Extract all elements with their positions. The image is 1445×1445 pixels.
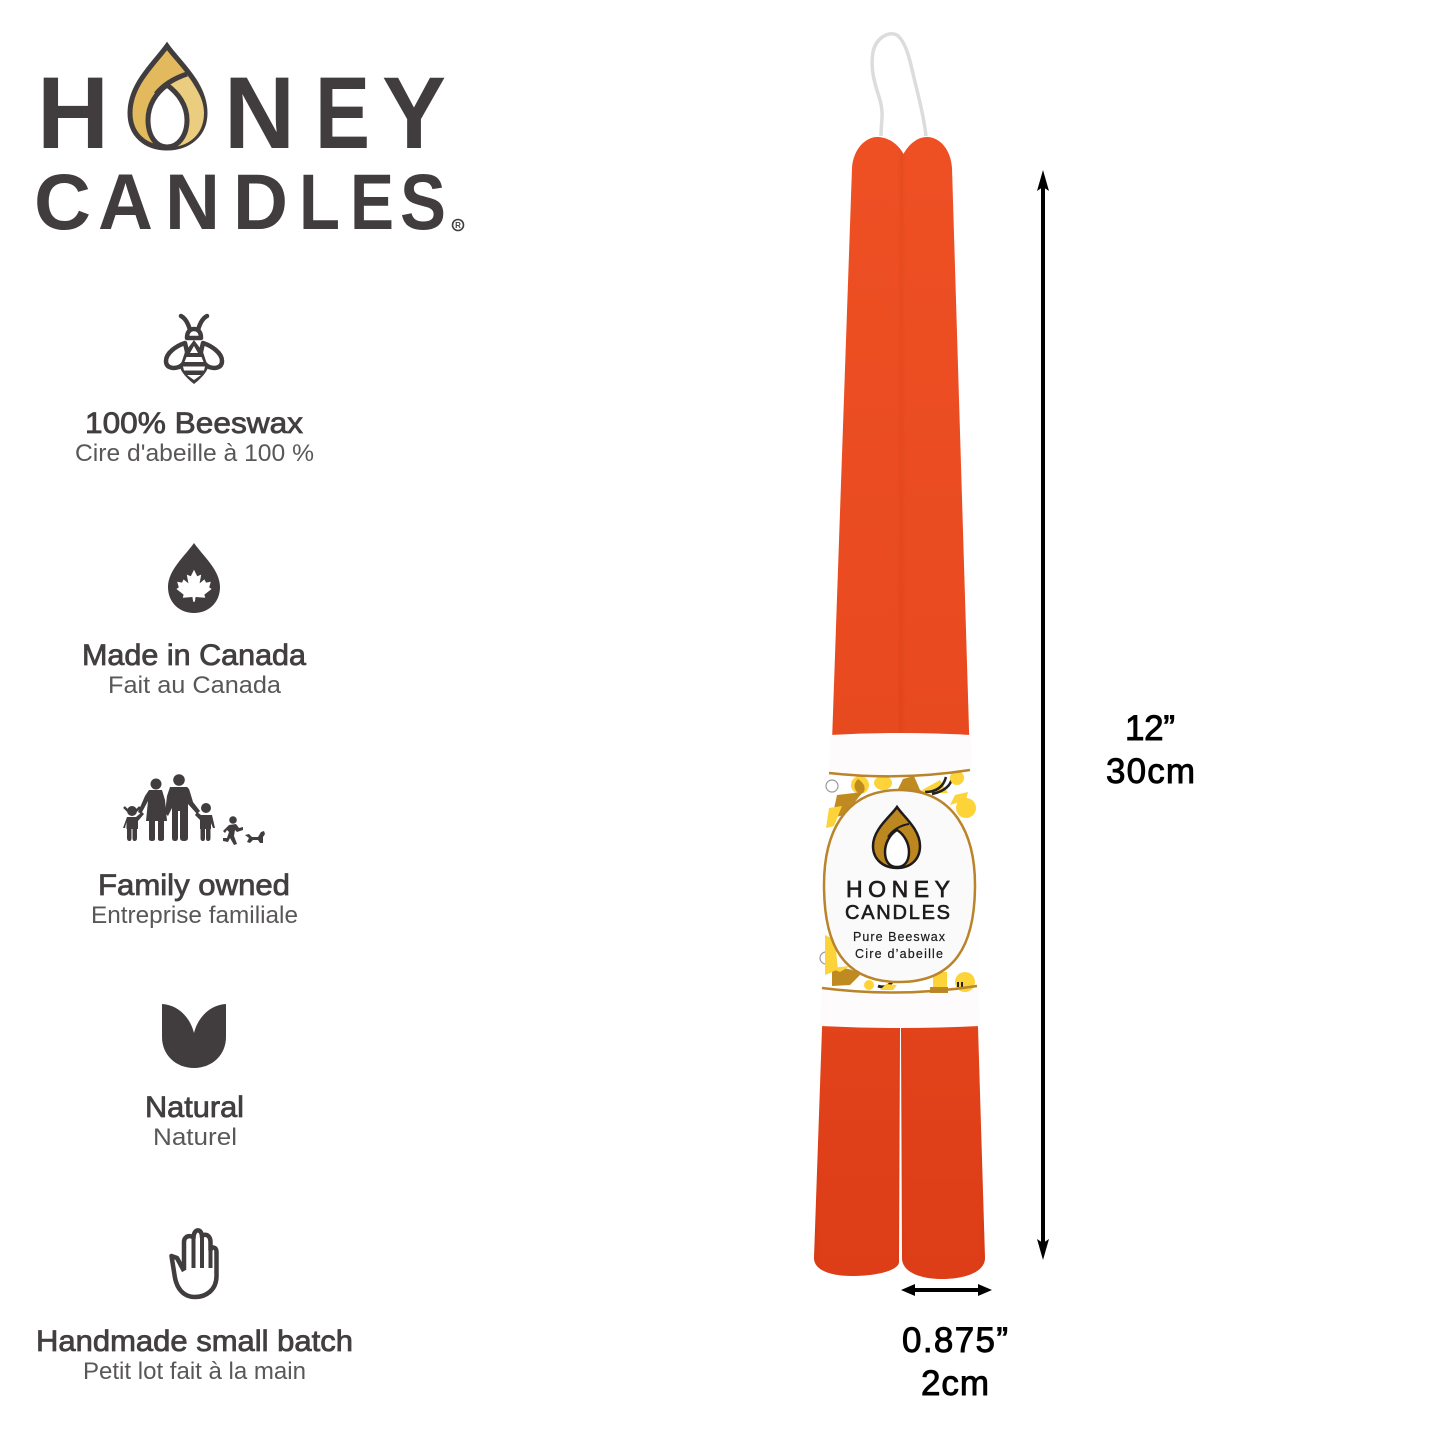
width dimension label: 2cm [921, 1364, 989, 1403]
label pattern [820, 771, 978, 993]
text: 100% Beeswax: Cire d'abeille à 100 % [75, 440, 314, 467]
text: Family owned: Family owned [98, 869, 290, 902]
registered mark [452, 220, 464, 230]
text: Natural: Naturel [153, 1124, 237, 1151]
icon: open hand [172, 1230, 216, 1297]
text: 100% Beeswax: 100% Beeswax [85, 407, 303, 440]
width dimension label: 0.875” [902, 1321, 1008, 1360]
right candle [899, 137, 985, 1279]
logo word: CANDLES: E [350, 157, 394, 246]
logo word: HONEY: Y [382, 56, 446, 170]
logo word: HONEY: E [315, 56, 370, 170]
label text: CANDLES [845, 902, 950, 924]
width arrow [901, 1284, 992, 1296]
label text: Cire d’abeille [855, 947, 943, 961]
text: Family owned: Entreprise familiale [91, 902, 298, 929]
text: Made in Canada: Fait au Canada [108, 672, 282, 699]
logo word: HONEY [37, 56, 446, 170]
candle pair [814, 137, 985, 1279]
height arrow [1037, 170, 1049, 1260]
height dimension label: 12” [1125, 709, 1175, 748]
logo: Honey Candles [34, 46, 464, 246]
text: Natural [145, 1091, 244, 1151]
logo icon: flame [130, 46, 205, 148]
candle paper label [820, 733, 980, 1028]
logo word: HONEY: H [37, 56, 109, 170]
text: Made in Canada [82, 639, 306, 699]
logo word: CANDLES: C [34, 157, 91, 246]
text: Handmade small batch: Handmade small batch [36, 1325, 353, 1358]
logo word: CANDLES: S [400, 157, 446, 246]
height dimension label: 30cm [1106, 752, 1195, 791]
text: Handmade small batch [36, 1325, 353, 1385]
label badge [824, 790, 975, 982]
label text [845, 876, 950, 961]
logo word: CANDLES: D [233, 157, 288, 246]
text: 100% Beeswax [75, 407, 314, 467]
label gold rules [822, 770, 977, 993]
candle wick [872, 34, 926, 136]
label flame mark [873, 807, 920, 868]
left candle [814, 137, 904, 1276]
height dimension label [1106, 709, 1195, 791]
text: Family owned [91, 869, 298, 929]
label text: Pure Beeswax [853, 930, 946, 944]
text: Handmade small batch: Petit lot fait à la main [83, 1358, 306, 1385]
registered mark: R [455, 221, 461, 230]
text: Natural: Natural [145, 1091, 244, 1124]
icon: bee [166, 316, 222, 384]
logo word: CANDLES [34, 157, 446, 246]
logo word: HONEY: N [224, 56, 295, 170]
icon: tulip leaf [162, 1004, 226, 1068]
icon: drop with maple leaf [168, 543, 220, 613]
icon: family silhouettes [123, 774, 265, 845]
text: Made in Canada: Made in Canada [82, 639, 306, 672]
label text: HONEY [846, 876, 950, 902]
logo word: CANDLES: L [299, 157, 340, 246]
logo word: CANDLES: N [165, 157, 220, 246]
width dimension label [902, 1321, 1008, 1403]
logo word: CANDLES: A [98, 157, 153, 246]
